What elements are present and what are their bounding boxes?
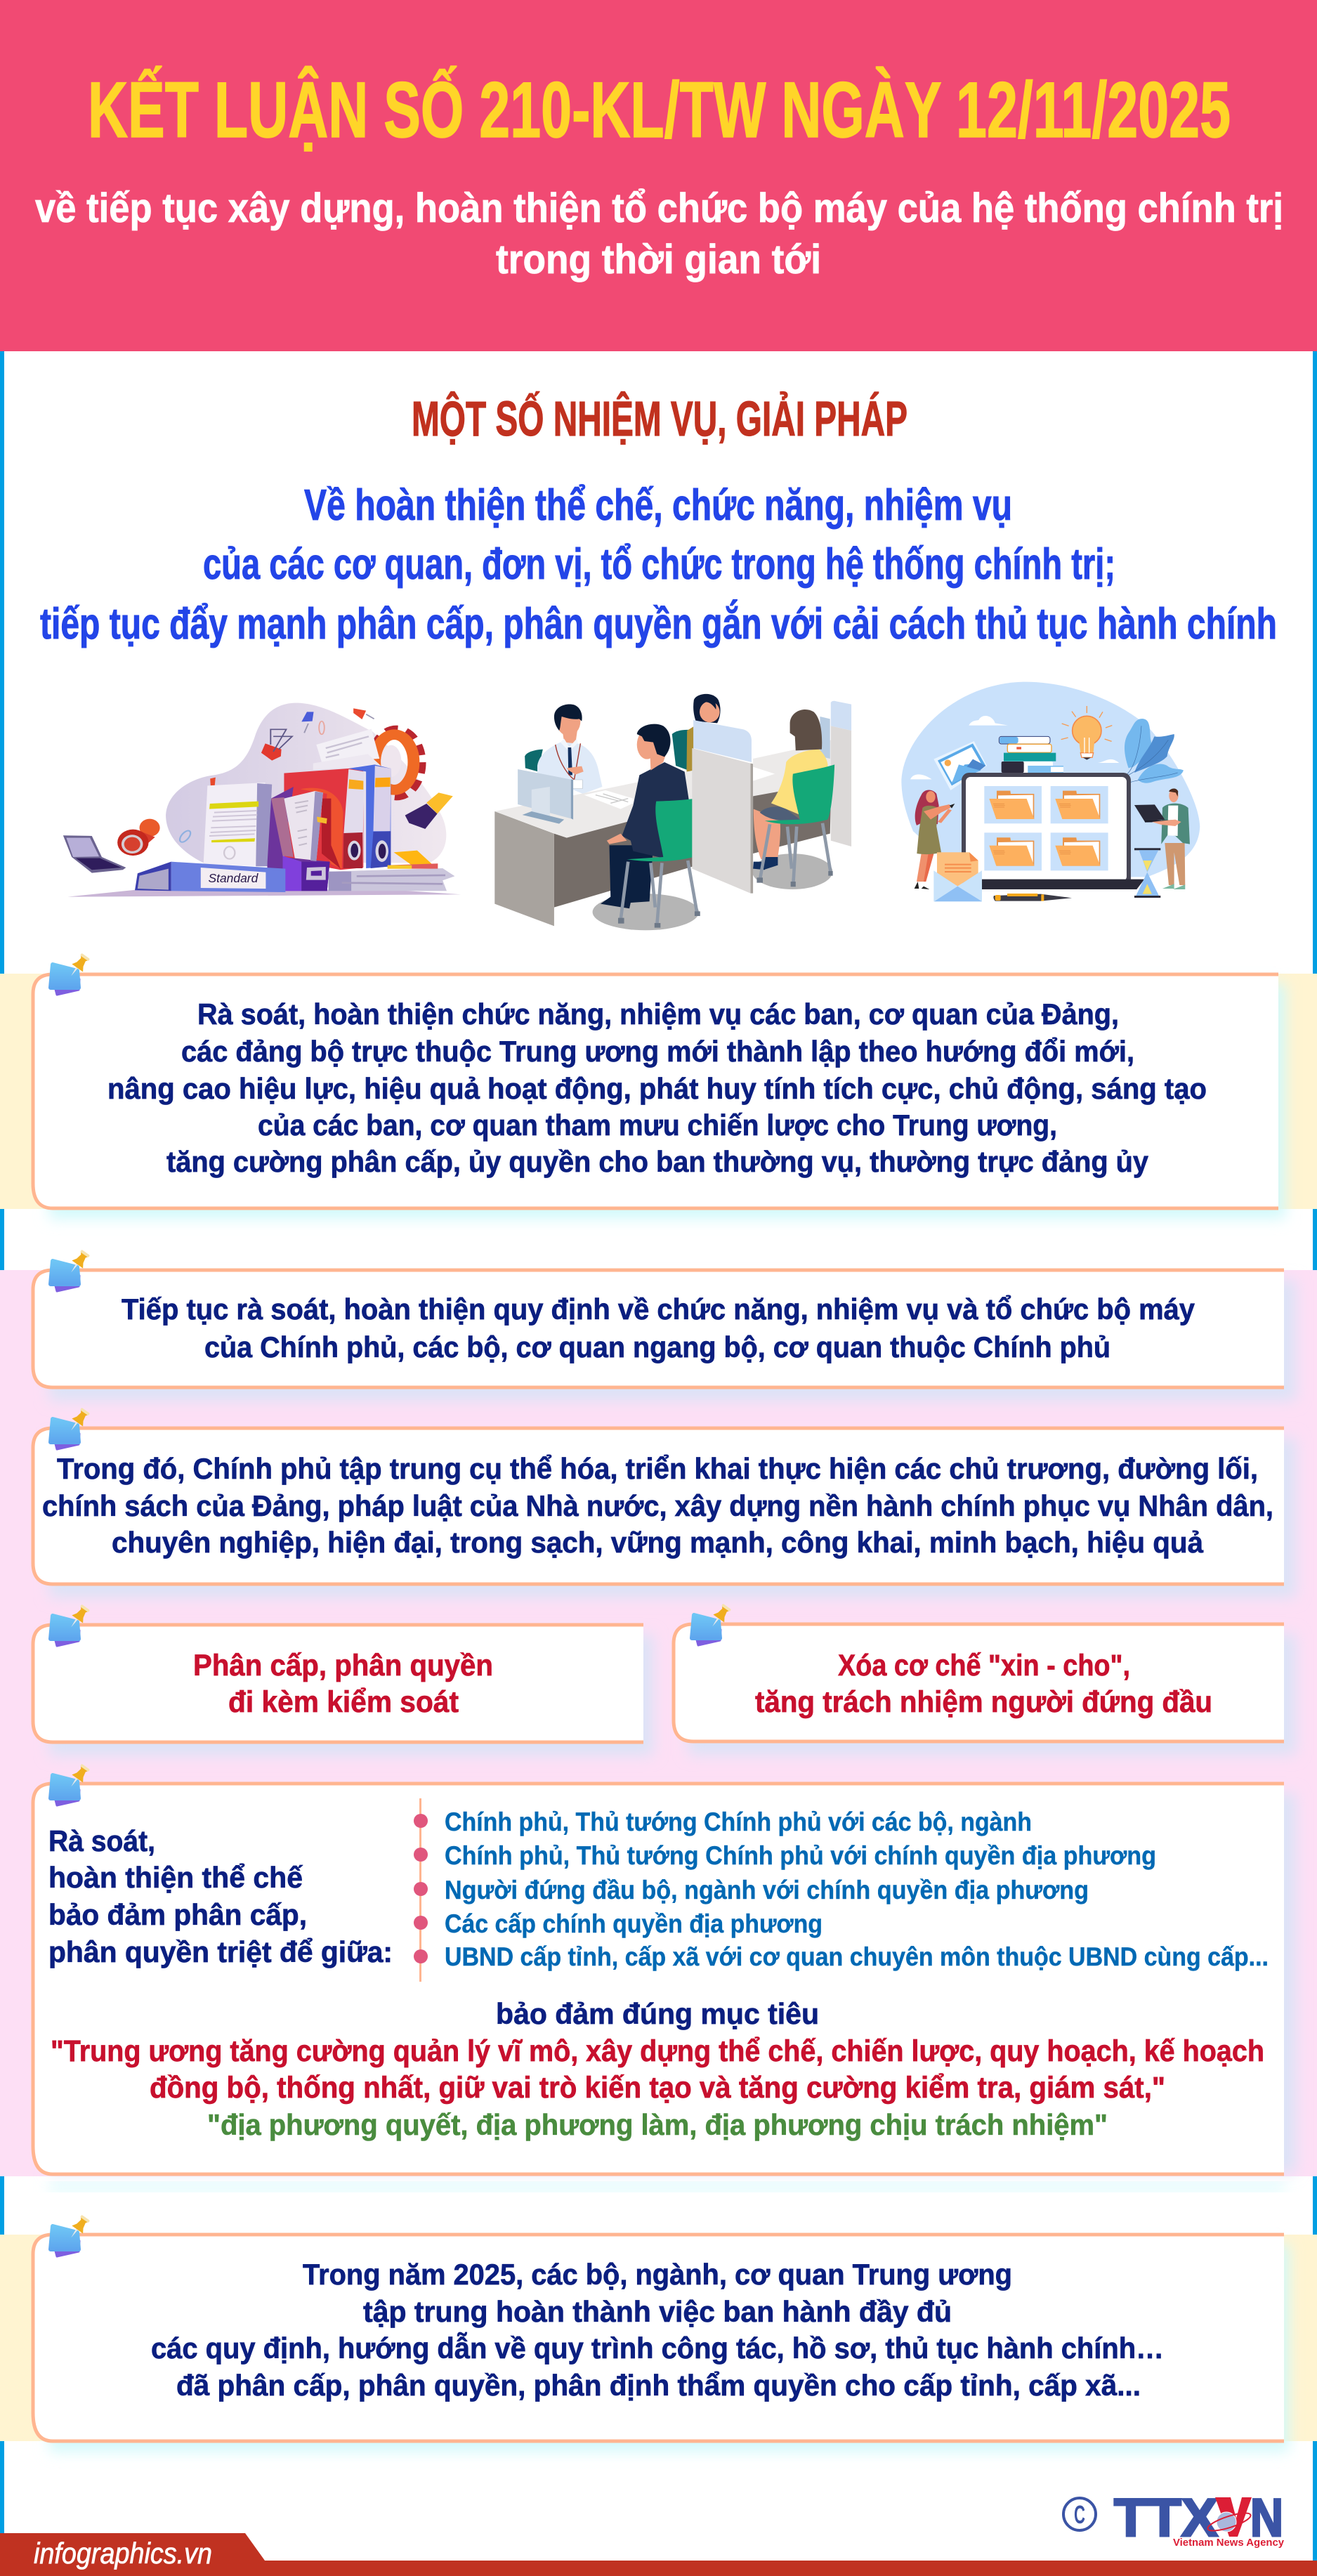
illustration: officials at service counter	[494, 694, 851, 930]
right blue edge	[1313, 351, 1317, 2561]
text block: các đảng bộ trực thuộc Trung ương mới thành lập theo hướng đổi mới,	[181, 1035, 1134, 1068]
icon: pinned note	[692, 1602, 733, 1645]
panel: review of party bodies	[33, 952, 1285, 1219]
text block	[193, 1649, 493, 1719]
list of relationships: Chính phủ, Thủ tướng Chính phủ với các bộ, ngành	[445, 1807, 1032, 1836]
logo: TTXVN: TTX	[1114, 2488, 1218, 2548]
text block: chuyên nghiệp, hiện đại, trong sạch, vững mạnh, công khai, minh bạch, hiệu quả	[112, 1526, 1204, 1559]
card	[33, 1625, 643, 1742]
band: pink middle	[0, 1270, 1317, 2176]
text block: tăng trách nhiệm người đứng đầu	[755, 1685, 1212, 1719]
panel: remove ask-give mechanism	[674, 1602, 1296, 1755]
timeline bullets	[414, 1798, 428, 1982]
objective text: đồng bộ, thống nhất, giữ vai trò kiến tạo và tăng cường kiểm tra, giám sát,"	[150, 2071, 1165, 2105]
list of relationships: Chính phủ, Thủ tướng Chính phủ với chính quyền địa phương	[445, 1841, 1156, 1870]
panel: government focus	[33, 1406, 1296, 1597]
illustration: documents and binders: Standard	[209, 871, 258, 886]
panel: 2025 deadline	[33, 2183, 1289, 2452]
icon: pinned note	[51, 1763, 91, 1805]
text block: tập trung hoàn thành việc ban hành đầy đủ	[363, 2295, 952, 2328]
icon: pinned note	[51, 1406, 91, 1449]
left text block	[48, 1824, 393, 1968]
card	[33, 2235, 1284, 2441]
subtitle	[35, 185, 1283, 282]
text block: Trong đó, Chính phủ tập trung cụ thể hóa, triển khai thực hiện các chủ trương, đường lối,	[57, 1452, 1258, 1485]
section subheading	[40, 481, 1277, 648]
list of relationships: Các cấp chính quyền địa phương	[445, 1909, 823, 1938]
list of relationships: UBND cấp tỉnh, cấp xã với cơ quan chuyên môn thuộc UBND cùng cấp...	[445, 1942, 1269, 1971]
text block	[122, 1293, 1195, 1364]
illustration: documents and binders	[63, 703, 461, 897]
text block: Tiếp tục rà soát, hoàn thiện quy định về chức năng, nhiệm vụ và tổ chức bộ máy	[122, 1293, 1195, 1326]
text block: đã phân cấp, phân quyền, phân định thẩm quyền cho cấp tỉnh, cấp xã...	[176, 2369, 1141, 2402]
section subheading: Về hoàn thiện thể chế, chức năng, nhiệm vụ	[304, 481, 1012, 530]
objective text: "địa phương quyết, địa phương làm, địa phương chịu trách nhiệm"	[207, 2108, 1108, 2141]
card	[33, 1270, 1284, 1387]
text block	[151, 2258, 1164, 2402]
left text block: Rà soát,	[48, 1824, 155, 1857]
left text block: bảo đảm phân cấp,	[48, 1898, 307, 1931]
list of relationships: Người đứng đầu bộ, ngành với chính quyền địa phương	[445, 1876, 1089, 1904]
card	[674, 1624, 1284, 1741]
text block: Rà soát, hoàn thiện chức năng, nhiệm vụ các ban, cơ quan của Đảng,	[197, 998, 1119, 1031]
panel: institutional review	[33, 1763, 1296, 2174]
subtitle: trong thời gian tới	[496, 237, 821, 282]
left blue edge	[0, 351, 4, 2536]
text block: nâng cao hiệu lực, hiệu quả hoạt động, phát huy tính tích cực, chủ động, sáng tạo	[107, 1072, 1207, 1105]
text block: các quy định, hướng dẫn về quy trình công tác, hồ sơ, thủ tục hành chính…	[151, 2331, 1164, 2365]
icon: pinned note	[51, 952, 91, 995]
icon: pinned note	[51, 2214, 91, 2256]
list of relationships	[445, 1807, 1269, 1971]
section heading: MỘT SỐ NHIỆM VỤ, GIẢI PHÁP	[412, 391, 908, 446]
logo: TTXVN	[1063, 2488, 1285, 2549]
card	[33, 1428, 1284, 1584]
text block	[107, 998, 1207, 1178]
icon: pinned note	[51, 1603, 91, 1646]
text block: của Chính phủ, các bộ, cơ quan ngang bộ, cơ quan thuộc Chính phủ	[204, 1331, 1110, 1364]
text block: Phân cấp, phân quyền	[193, 1649, 493, 1682]
panel: government functions	[33, 1248, 1296, 1401]
text block	[755, 1649, 1212, 1719]
text block: của các ban, cơ quan tham mưu chiến lược cho Trung ương,	[258, 1109, 1057, 1142]
text block: Trong năm 2025, các bộ, ngành, cơ quan Trung ương	[303, 2258, 1012, 2291]
card	[33, 1784, 1284, 2174]
illustration: digital files on laptop	[901, 682, 1200, 901]
logo: TTXVN: C	[1074, 2500, 1085, 2529]
panel: decentralisation with control	[33, 1603, 653, 1756]
objective text	[51, 1997, 1264, 2141]
card	[33, 974, 1278, 1208]
footer bar	[0, 2533, 1317, 2576]
footer site name: infographics.vn	[34, 2537, 212, 2570]
header banner	[0, 0, 1317, 351]
text block: tăng cường phân cấp, ủy quyền cho ban thường vụ, thường trực đảng ủy	[166, 1145, 1149, 1178]
band: yellow top	[0, 974, 1317, 1209]
bottom glow	[49, 2244, 1289, 2452]
text block: Xóa cơ chế "xin - cho",	[838, 1649, 1130, 1682]
left text block: hoàn thiện thể chế	[48, 1861, 303, 1894]
text block: chính sách của Đảng, pháp luật của Nhà nước, xây dựng nền hành chính phục vụ Nhân dân,	[42, 1489, 1273, 1522]
text block: đi kèm kiểm soát	[228, 1685, 459, 1719]
logo: TTXVN: N	[1250, 2488, 1283, 2548]
band: yellow bottom	[0, 2235, 1317, 2441]
text block	[42, 1452, 1273, 1559]
logo: TTXVN: Vietnam News Agency	[1173, 2537, 1285, 2549]
left text block: phân quyền triệt để giữa:	[48, 1935, 393, 1968]
objective text: bảo đảm đúng mục tiêu	[496, 1997, 819, 2030]
icon: pinned note	[51, 1248, 91, 1291]
